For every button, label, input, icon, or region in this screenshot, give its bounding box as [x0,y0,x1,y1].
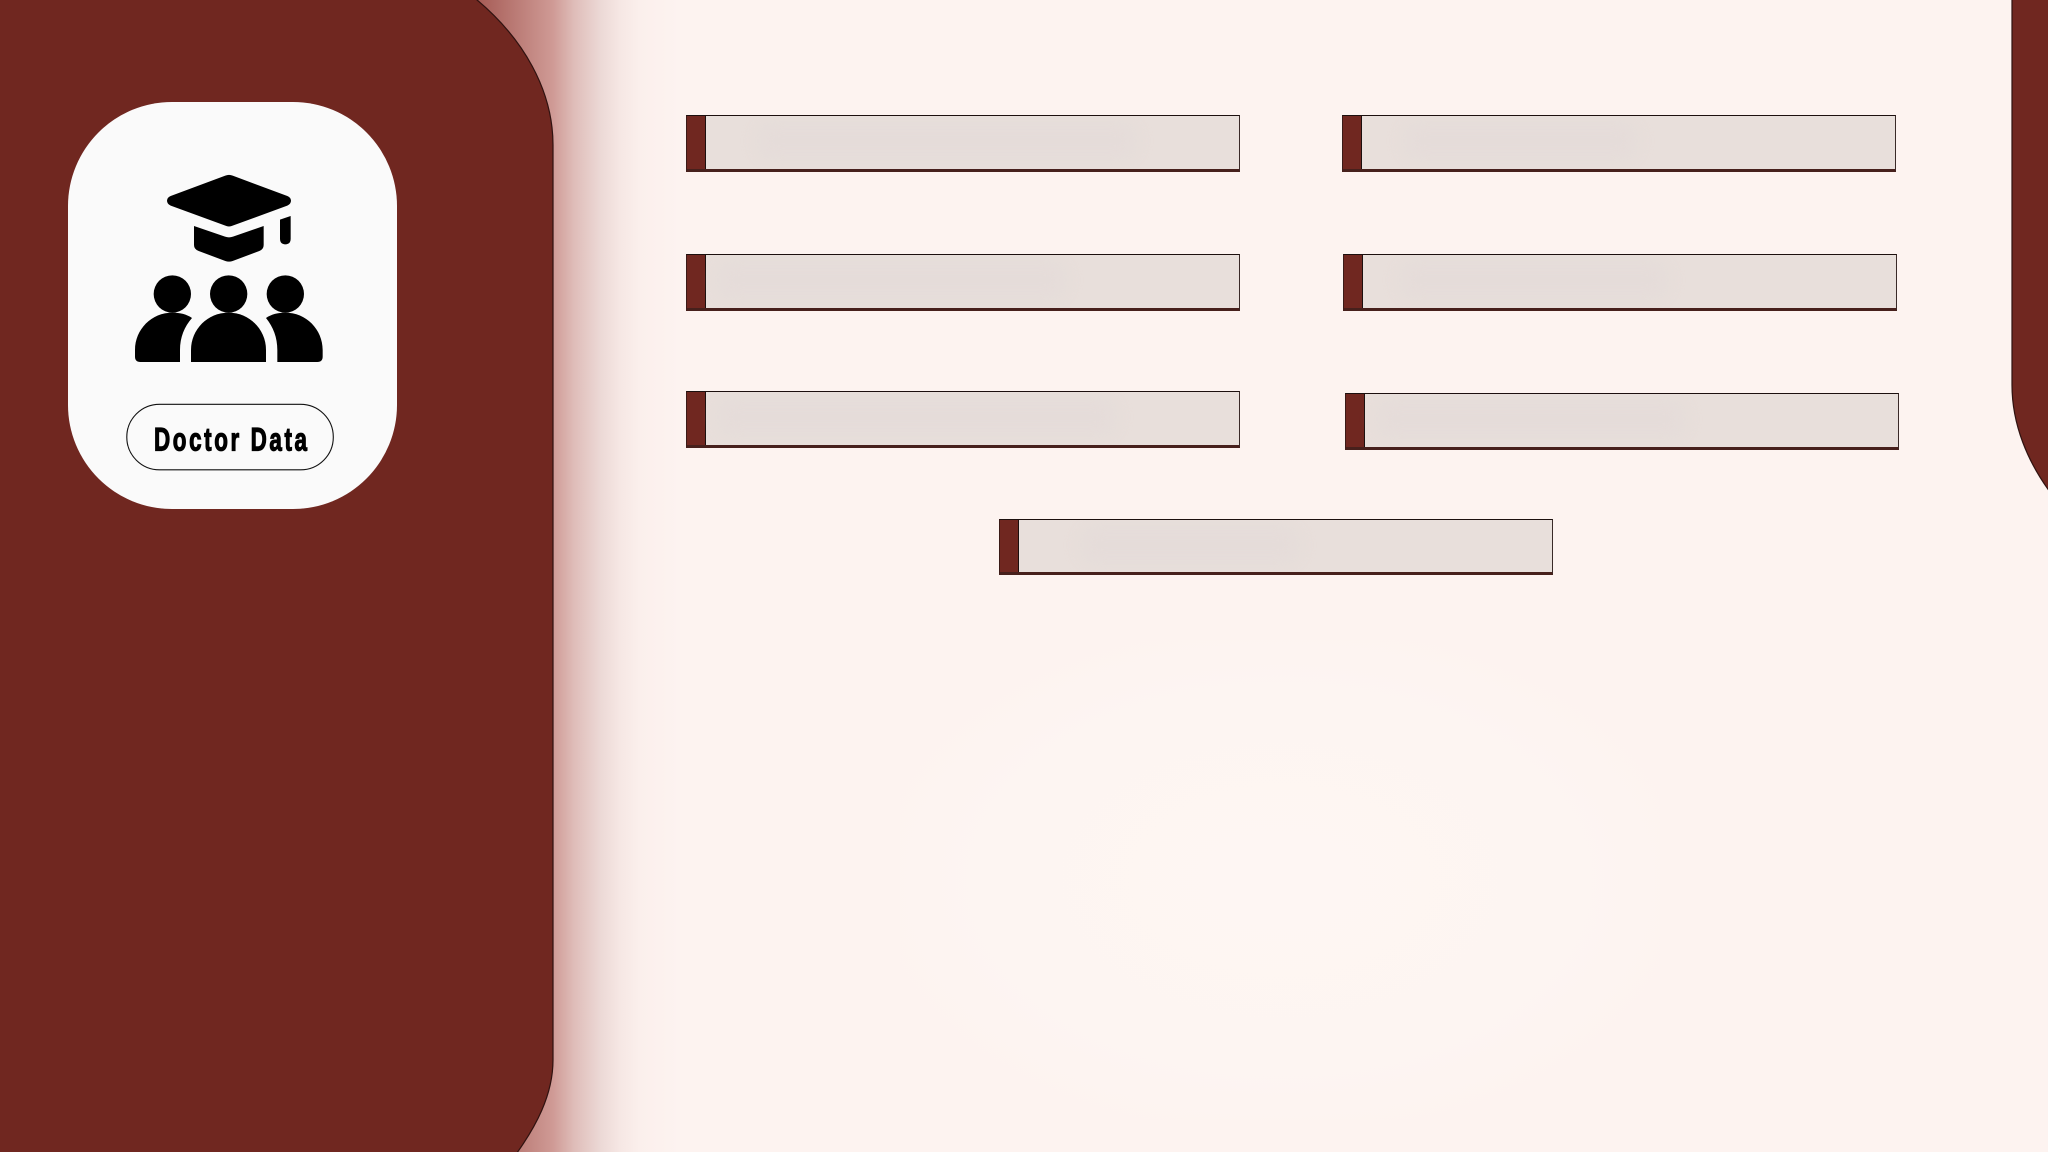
name pill [126,404,334,470]
bar: row 1 right [1342,115,1896,172]
panel: right corner shape [2011,0,2048,490]
background wash [900,640,1660,1120]
bar: row 1 left [686,115,1240,172]
icon: graduation cap over three people [135,174,323,362]
bar: row 2 right [1343,254,1897,310]
bar: row 2 left [686,254,1240,310]
logo card [68,102,397,509]
bar: row 3 right [1345,393,1899,450]
name pill: Doctor Data [154,422,308,457]
panel glow [440,0,680,1152]
panel: left sidebar [0,0,554,1152]
bar: centre [999,518,1553,575]
bar: row 3 left [686,391,1240,448]
